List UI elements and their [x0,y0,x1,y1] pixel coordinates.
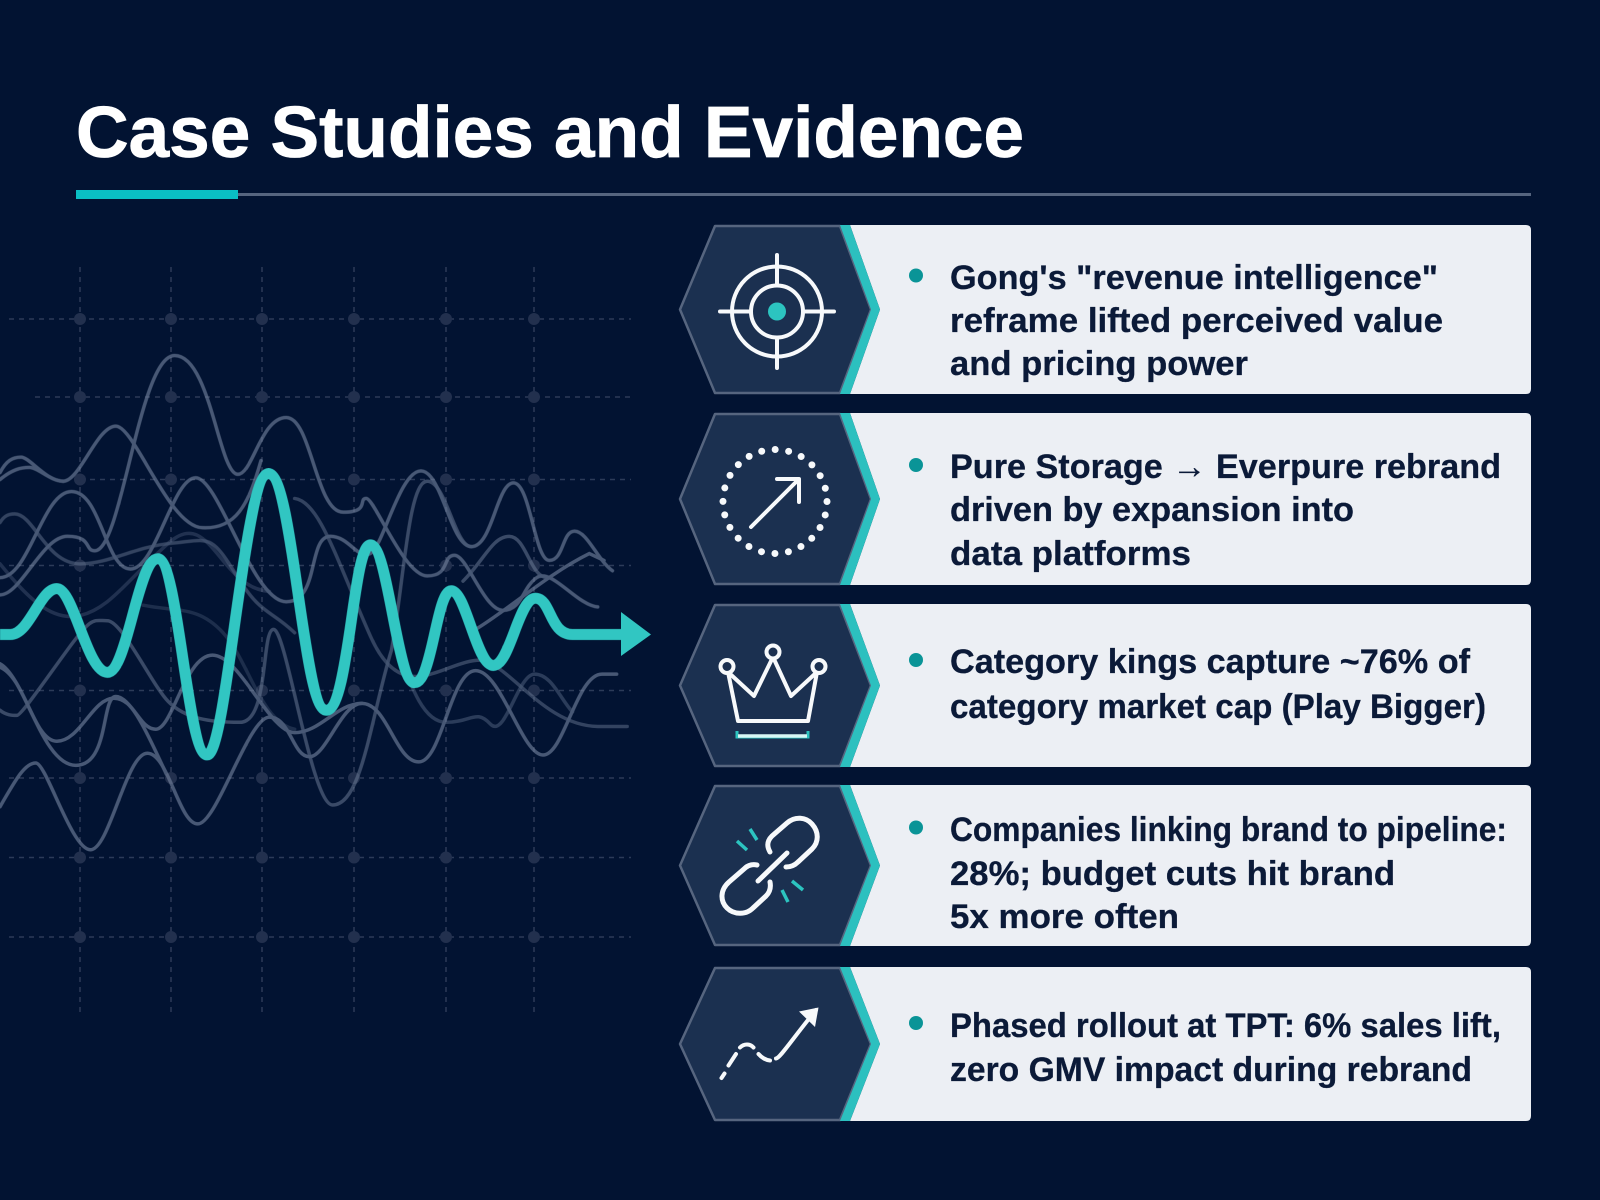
text: Category kings [950,643,1486,726]
text: Pure Storage: driven by expansion into [950,491,1354,529]
text: Pure Storage: data platforms [950,535,1191,573]
icon: dotted circle with arrow [723,450,827,554]
text: Brand to pipeline: 5x more often [950,898,1179,936]
text: Brand to pipeline: Companies linking brand to pipeline: [950,811,1507,849]
panel: Gong [680,225,1531,394]
title: Case Studies and Evidence [76,93,1024,173]
grey noise waves [0,355,627,850]
signal chart: noise lines resolving into a clear teal signal [0,267,651,1016]
text: Gong [950,259,1443,383]
icon: target [720,255,834,368]
text: Pure Storage: Pure Storage → Everpure rebrand [950,448,1501,486]
text: Gong: and pricing power [950,345,1248,383]
text: Phased rollout: zero GMV impact during rebrand [950,1051,1472,1089]
text: Category kings: Category kings capture ~76% of [950,643,1471,681]
text: Gong: Gong's "revenue intelligence" [950,259,1438,297]
icon: rising dashed trend arrow [722,1008,818,1078]
icon: broken chain link [722,818,817,913]
panel: Brand to pipeline [680,785,1531,946]
text: Phased rollout [950,1007,1501,1089]
text: Gong: reframe lifted perceived value [950,302,1443,340]
signal arrow head [621,612,651,656]
text: Category kings: category market cap (Play Bigger) [950,688,1486,726]
title underline [76,190,1531,199]
teal signal wave [0,474,623,755]
text: Brand to pipeline [950,811,1507,936]
icon: crown [720,646,826,737]
text: Brand to pipeline: 28%; budget cuts hit brand [950,855,1395,893]
panel: Category kings [680,604,1531,767]
panel: Pure Storage [680,413,1531,585]
text: Pure Storage [950,448,1501,573]
chart grid [9,267,631,1016]
panel: Phased rollout [680,967,1531,1121]
text: Phased rollout: Phased rollout at TPT: 6% sales lift, [950,1007,1501,1045]
